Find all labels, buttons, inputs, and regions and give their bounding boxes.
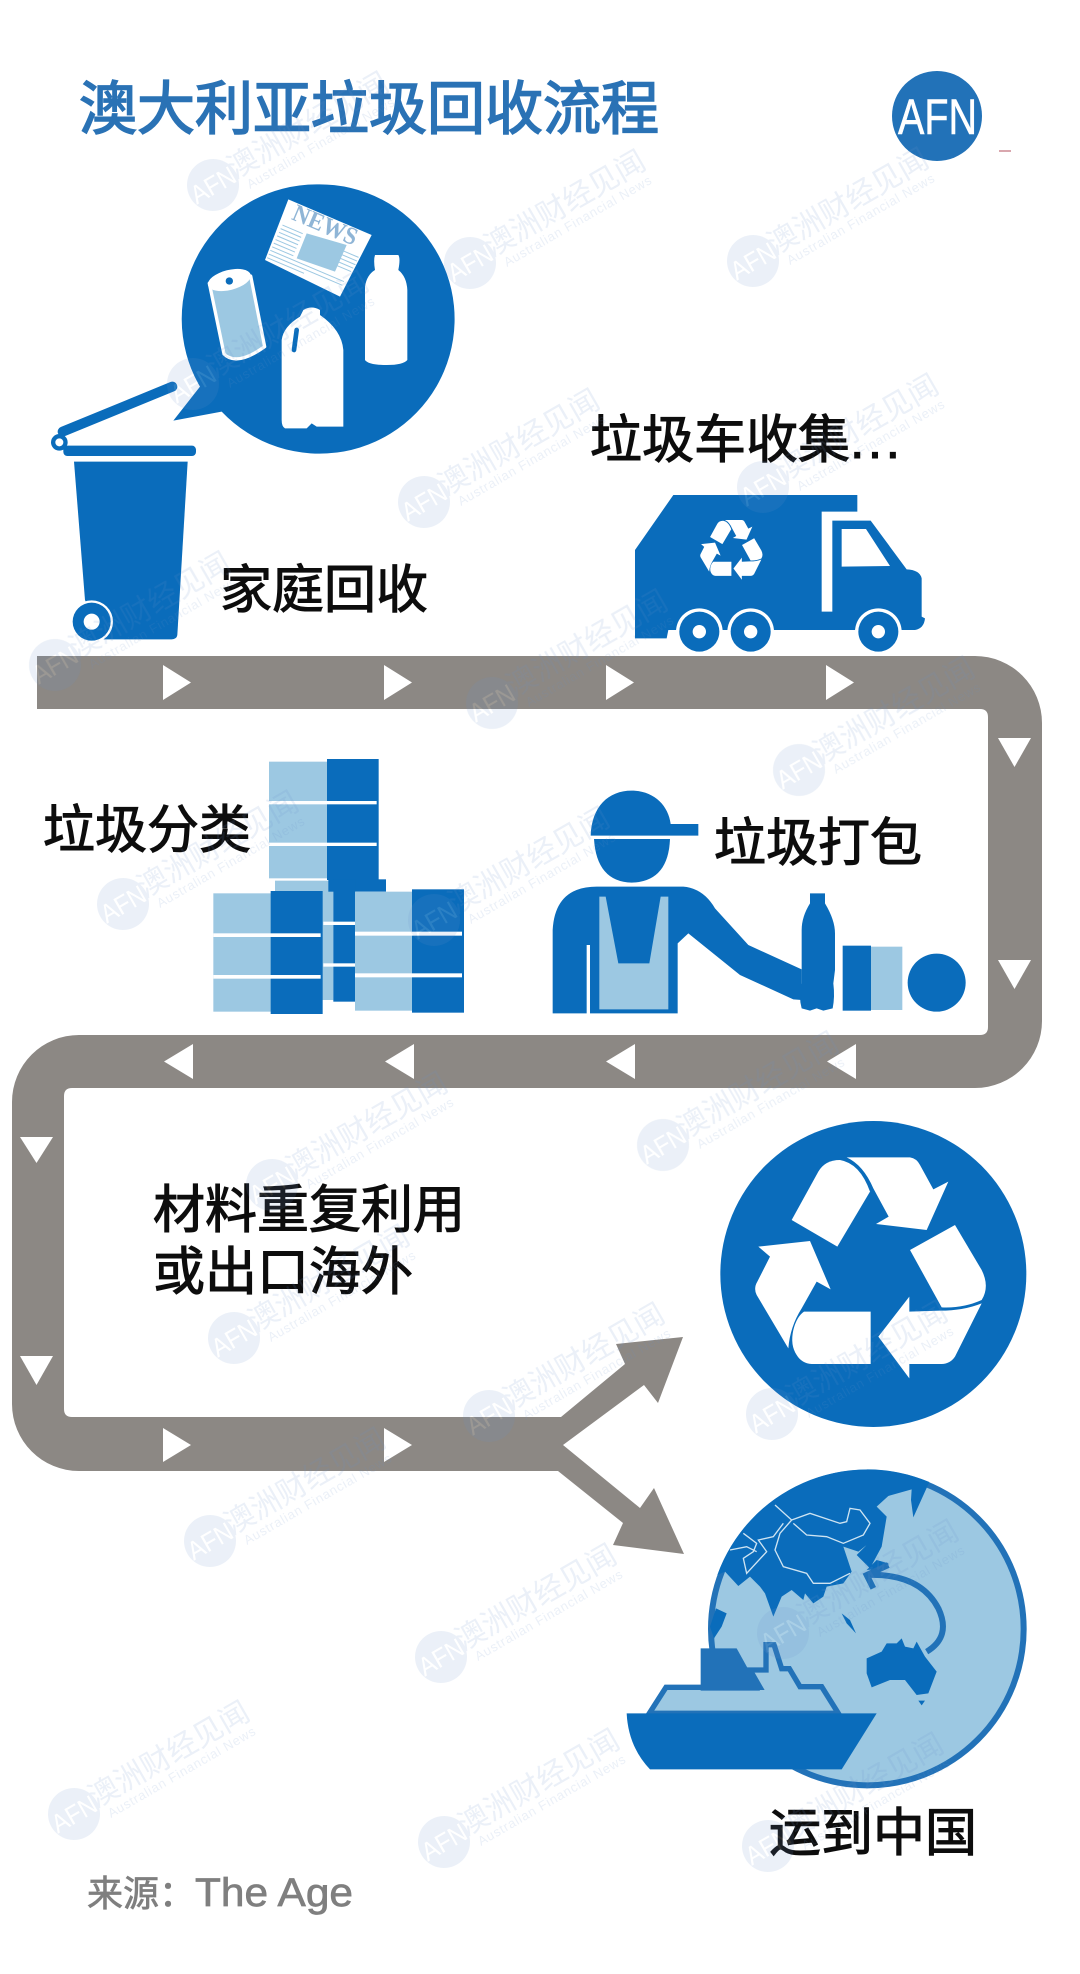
- icon: recycling symbol: [720, 1121, 1026, 1427]
- watermarks: Australian Financial News: [472, 1566, 625, 1664]
- watermarks: AFN: [740, 1821, 796, 1871]
- icon: wheelie bin with speech bubble of recyclables: [51, 184, 455, 643]
- watermarks: AFN: [635, 1120, 691, 1170]
- icon: globe with ship: [627, 1469, 1024, 1785]
- australia: [867, 1638, 937, 1695]
- logo: AFN: AFN: [898, 89, 977, 145]
- watermarks: AFN: [165, 359, 221, 409]
- watermarks: 澳洲财经见闻: [202, 266, 374, 384]
- watermarks: Australian Financial News: [830, 679, 983, 777]
- watermarks: 澳洲财经见闻: [219, 1423, 391, 1541]
- globe: [711, 1473, 1024, 1785]
- watermarks: Australian Financial News: [241, 1450, 394, 1548]
- icon: jug: [282, 307, 343, 428]
- watermarks: 澳洲财经见闻: [132, 786, 304, 904]
- icon: worker with bottle and bales: [553, 791, 966, 1013]
- label: shipped to China: 运到中国: [769, 1805, 977, 1863]
- watermarks: AFN: [95, 879, 151, 929]
- watermarks: 澳洲财经见闻: [498, 1298, 670, 1416]
- watermarks: 澳洲财经见闻: [781, 1296, 953, 1414]
- watermarks: AFN: [46, 1789, 102, 1839]
- bin lid: [51, 387, 196, 456]
- watermarks: Australian Financial News: [784, 170, 937, 268]
- watermarks: Australian Financial News: [799, 1755, 952, 1853]
- icon: garbage truck: [635, 495, 925, 655]
- title: 澳大利亚垃圾回收流程: [79, 77, 659, 142]
- watermarks: 澳洲财经见闻: [64, 547, 236, 665]
- watermarks: Australian Financial News: [455, 411, 608, 509]
- label: reuse or export: 材料重复利用: [153, 1182, 465, 1240]
- watermarks: AFN: [755, 1608, 811, 1658]
- watermarks: 澳洲财经见闻: [762, 143, 934, 261]
- watermarks: 澳洲财经见闻: [281, 1067, 453, 1185]
- watermarks: AFN: [413, 1632, 469, 1682]
- watermarks: AFN: [185, 160, 241, 210]
- watermarks: Australian Financial News: [465, 829, 618, 927]
- icon: newspaper: [265, 199, 372, 297]
- label: reuse or export: 或出口海外: [153, 1244, 413, 1302]
- watermarks: 澳洲财经见闻: [792, 1515, 964, 1633]
- watermarks: AFN: [206, 1313, 262, 1363]
- watermarks: Australian Financial News: [694, 1054, 847, 1152]
- mark: [999, 150, 1011, 152]
- label: sorting: 垃圾分类: [43, 802, 251, 860]
- watermarks: Australian Financial News: [814, 1542, 967, 1640]
- islands and africa: [710, 1545, 925, 1705]
- ship funnel: [701, 1648, 760, 1691]
- icon: bottle: [365, 255, 407, 365]
- ship hull: [627, 1713, 877, 1769]
- icon: stacked bales: [213, 759, 464, 1014]
- watermarks: AFN: [725, 236, 781, 286]
- watermarks: Australian Financial News: [244, 94, 397, 192]
- label: household recycling: 家庭回收: [220, 562, 428, 620]
- watermarks: AFN: [464, 678, 520, 728]
- watermarks: Australian Financial News: [265, 1247, 418, 1345]
- watermarks: Australian Financial News: [501, 172, 654, 270]
- bin body: [74, 462, 188, 639]
- watermarks: AFN: [244, 1160, 300, 1210]
- ship superstructure: [649, 1645, 838, 1713]
- watermarks: Australian Financial News: [154, 813, 307, 911]
- logo: AFN: [892, 71, 982, 161]
- watermarks: AFN: [27, 640, 83, 690]
- route arrow: [867, 1565, 943, 1652]
- asia landmass: [717, 1469, 929, 1617]
- watermarks: 澳洲财经见闻: [672, 1027, 844, 1145]
- watermarks: Australian Financial News: [520, 1325, 673, 1423]
- watermarks: 澳洲财经见闻: [222, 67, 394, 185]
- watermarks: 澳洲财经见闻: [243, 1220, 415, 1338]
- watermarks: AFN: [744, 1389, 800, 1439]
- country borders: [730, 1505, 870, 1583]
- watermarks: 澳洲财经见闻: [433, 384, 605, 502]
- conveyor path with forked arrows: [12, 656, 1042, 1554]
- watermarks: 澳洲财经见闻: [479, 145, 651, 263]
- direction arrows on conveyor: [20, 665, 1031, 1462]
- watermarks: AFN: [182, 1516, 238, 1566]
- label: reuse or export: [153, 1182, 465, 1302]
- watermarks: 澳洲财经见闻: [808, 652, 980, 770]
- watermarks: 澳洲财经见闻: [83, 1696, 255, 1814]
- watermarks: AFN: [406, 895, 462, 945]
- watermarks: 澳洲财经见闻: [772, 369, 944, 487]
- watermarks: 澳洲财经见闻: [450, 1539, 622, 1657]
- watermarks: Australian Financial News: [803, 1323, 956, 1421]
- label: truck collection: 垃圾车收集...: [590, 412, 900, 470]
- watermarks: Australian Financial News: [794, 396, 947, 494]
- watermarks: AFN: [735, 462, 791, 512]
- speech bubble: [173, 184, 455, 454]
- watermarks: Australian Financial News: [224, 293, 377, 391]
- watermarks: Australian Financial News: [86, 574, 239, 672]
- icon: newspaper: NEWS: [288, 200, 362, 251]
- watermarks: Australian Financial News: [475, 1751, 628, 1849]
- watermarks: 澳洲财经见闻: [443, 802, 615, 920]
- watermarks: AFN: [461, 1391, 517, 1441]
- label: baling: 垃圾打包: [714, 815, 922, 873]
- watermarks: 澳洲财经见闻: [501, 585, 673, 703]
- watermarks: AFN: [771, 745, 827, 795]
- watermarks: AFN: [442, 238, 498, 288]
- watermarks: Australian Financial News: [523, 612, 676, 710]
- bin wheel: [70, 600, 113, 643]
- watermarks: 澳洲财经见闻: [453, 1724, 625, 1842]
- watermarks: AFN: [416, 1817, 472, 1867]
- watermarks: AFN: [396, 477, 452, 527]
- watermarks: 澳洲财经见闻: [777, 1728, 949, 1846]
- watermarks: Australian Financial News: [105, 1723, 258, 1821]
- source note: 来源：The Age: [87, 1871, 353, 1915]
- watermarks: Australian Financial News: [303, 1094, 456, 1192]
- icon: can: [206, 265, 265, 359]
